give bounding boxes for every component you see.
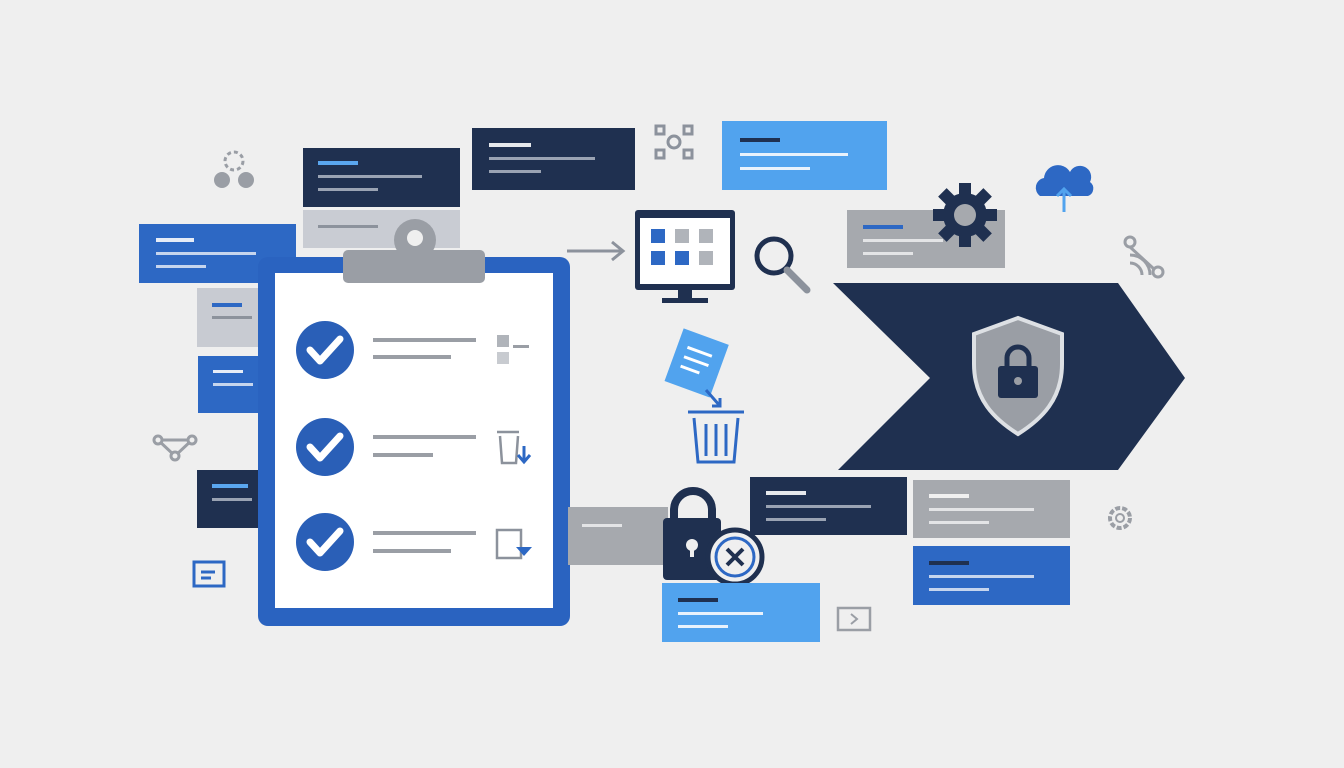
check item 1 (296, 321, 529, 379)
card: dark top middle (472, 128, 635, 190)
icon: small gear right (1110, 508, 1130, 528)
check item 3 (296, 513, 532, 571)
card: light blue bottom (662, 583, 820, 642)
icon: nodes (656, 126, 692, 158)
clipboard (258, 219, 570, 626)
icon: shield lock (974, 318, 1062, 434)
icon: document into trash (665, 328, 744, 462)
icon: cloud upload (1036, 165, 1093, 212)
card: gray bottom right (913, 480, 1070, 538)
icon: triangle nodes (154, 436, 196, 460)
icon: small play box (838, 608, 870, 630)
card: light blue top (722, 121, 887, 190)
arrow: to monitor (567, 242, 623, 260)
icon: small card left (194, 562, 224, 586)
card: blue left (139, 224, 296, 283)
icon: rss (1125, 237, 1163, 277)
card: blue bottom right (913, 546, 1070, 605)
card: blue left small (198, 356, 260, 413)
card: dark left small (197, 470, 259, 528)
icon: gear (933, 183, 997, 247)
card: dark top left (303, 148, 460, 207)
clipboard clip (343, 219, 485, 283)
arrow chevron with shield (833, 283, 1185, 470)
icon: lock with x (663, 491, 762, 584)
card: dark bottom (750, 477, 907, 535)
icon: magnifier (757, 239, 807, 290)
icon: monitor (635, 210, 735, 303)
icon: network circles (214, 152, 254, 188)
card: gray middle bottom (568, 507, 668, 565)
card: gray right with gear (847, 210, 1005, 268)
card: light gray left (197, 288, 259, 347)
check item 2 (296, 418, 530, 476)
card: gray behind clipboard (303, 210, 460, 248)
